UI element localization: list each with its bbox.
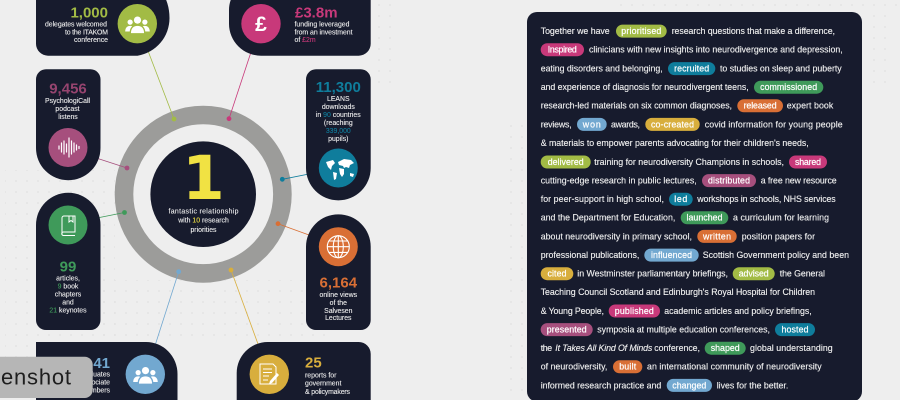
text line 5: released xyxy=(744,101,777,111)
centre caption: priorities xyxy=(190,227,217,234)
text line 2: clinicians with new insights into neurodivergence and depression, xyxy=(589,45,843,55)
text line 7: & materials to empower parents advocating for their children's needs, xyxy=(541,138,809,148)
panel: 1,000 delegates: to the ITAKOM xyxy=(65,30,108,36)
text line 15: Teaching Council Scotland and Edinburgh's Royal Hospital for Children xyxy=(541,287,815,297)
text line 5: research-led materials on six common diagnoses, xyxy=(541,101,732,111)
panel: 1,000 delegates: 1,000 xyxy=(70,4,108,22)
panel: 11,300 downloads: 339,000 xyxy=(326,128,351,135)
icon: people xyxy=(118,4,157,43)
text line 12: about neurodiversity in primary school, xyxy=(541,231,692,241)
text line 14: the General xyxy=(780,269,825,279)
text line 11: launched xyxy=(686,213,723,223)
text line 13: professional publications, xyxy=(541,250,639,260)
panel: £3.8m funding: of £2m xyxy=(294,37,316,44)
text line 20: informed research practice and xyxy=(541,380,661,390)
text line 11: and the Department for Education, xyxy=(541,213,675,223)
text line 18: global understanding xyxy=(750,343,833,353)
text line 13: Scottish Government policy and been xyxy=(703,250,849,260)
panel: 99 articles: 21 keynotes xyxy=(49,308,87,314)
text line 16: academic articles and policy briefings, xyxy=(664,306,812,316)
text line 11 xyxy=(541,211,829,224)
panel: 99 articles xyxy=(36,193,100,330)
text line 9: distributed xyxy=(708,176,750,186)
text line 14: advised xyxy=(739,269,769,279)
text line 8 xyxy=(541,156,827,168)
text line 2: Inspired xyxy=(548,45,577,55)
panel: 99 articles: articles, xyxy=(56,276,80,282)
text line 14 xyxy=(541,267,825,280)
panel: 1,000 delegates xyxy=(36,0,170,56)
panel: 9,456 podcast listens: 9,456 xyxy=(49,80,87,98)
text line 9 xyxy=(541,174,837,187)
text line 16: published xyxy=(615,306,654,316)
icon: world map xyxy=(319,148,358,188)
text line 18: the xyxy=(541,343,552,353)
text line 13 xyxy=(541,249,849,262)
text line 20 xyxy=(541,379,788,392)
screenshot overlay label: enshot xyxy=(1,364,71,390)
icon: pound sign xyxy=(241,4,281,43)
icon: people xyxy=(126,355,165,394)
text line 18: It Takes All Kind Of Minds xyxy=(555,343,653,353)
panel: 41 graduates: 41 xyxy=(93,355,110,372)
panel: 41 graduates: graduates xyxy=(79,372,111,379)
panel: 99 articles: 9 book xyxy=(58,284,79,290)
text line 4 xyxy=(541,81,823,94)
text line 6: reviews, xyxy=(541,119,572,129)
panel: 11,300 downloads: 11,300 xyxy=(316,79,361,96)
panel: 25 reports: 25 xyxy=(305,354,322,372)
screenshot overlay label xyxy=(0,357,93,398)
text line 8: training for neurodiversity Champions in schools, xyxy=(594,157,784,167)
text line 8: delivered xyxy=(548,157,584,167)
text line 20: changed xyxy=(672,380,706,390)
text line 5 xyxy=(541,99,834,112)
text line 18: conference, xyxy=(654,343,700,353)
panel: 6,164 views: Salvesen xyxy=(324,308,353,315)
big number 1: 1 xyxy=(182,143,225,214)
panel: 6,164 views: 6,164 xyxy=(320,274,358,292)
text line 17: presented xyxy=(547,324,587,334)
panel: 41 graduates: associate xyxy=(81,380,110,387)
panel: 11,300 downloads: in 90 countries xyxy=(316,112,361,119)
panel: 6,164 views xyxy=(306,214,371,330)
text line 9: cutting-edge research in public lectures, xyxy=(541,176,697,186)
panel: 25 reports xyxy=(237,342,371,400)
icon: pound sign: £ xyxy=(255,13,267,36)
panel: narrative text xyxy=(527,12,862,400)
text line 4: commissioned xyxy=(760,82,817,92)
text line 1: Together we have xyxy=(541,26,610,36)
text line 18: shaped xyxy=(711,343,740,353)
panel: 9,456 podcast listens: podcast xyxy=(55,106,80,113)
panel: 25 reports: & policymakers xyxy=(305,389,351,396)
text line 4: and experience of diagnosis for neurodivergent teens, xyxy=(541,82,749,92)
connector lines xyxy=(87,43,320,355)
panel: 9,456 podcast listens: PsychologiCall xyxy=(45,98,90,105)
text line 6: co-created xyxy=(651,119,694,129)
panel: 1,000 delegates: delegates welcomed xyxy=(45,22,107,28)
text line 14: cited xyxy=(548,269,567,279)
text line 11: a curriculum for learning xyxy=(733,213,829,223)
panel: 6,164 views: online views xyxy=(320,292,358,299)
panel: 41 graduates: members xyxy=(81,388,111,395)
text line 14: in Westminster parliamentary briefings, xyxy=(577,269,728,279)
panel: 9,456 podcast listens: listens xyxy=(58,114,78,121)
text line 13: influenced xyxy=(651,250,692,260)
text line 9: a free new resource xyxy=(761,176,837,186)
panel: 25 reports: reports for xyxy=(305,372,337,379)
panel: 25 reports: government xyxy=(305,380,341,388)
text line 3: recruited xyxy=(674,64,709,74)
panel: 99 articles: chapters xyxy=(55,292,82,298)
text line 17: hosted xyxy=(782,324,809,334)
panel: £3.8m funding: funding leveraged xyxy=(294,22,350,28)
panel: £3.8m funding: £3.8m xyxy=(295,4,338,22)
panel: 99 articles: and xyxy=(62,300,74,306)
centre caption xyxy=(168,208,239,234)
text line 6: won xyxy=(582,119,601,129)
text line 19: of neurodiversity, xyxy=(541,362,607,372)
text line 3: to studies on sleep and puberty xyxy=(720,64,842,74)
panel: £3.8m funding xyxy=(229,0,371,56)
text line 20: lives for the better. xyxy=(717,380,788,390)
text line 5: expert book xyxy=(787,101,834,111)
panel: 41 graduates xyxy=(36,342,178,400)
panel: 11,300 downloads: LEANS xyxy=(327,96,350,103)
text line 17: symposia at multiple education conferences, xyxy=(597,324,770,334)
icon: book xyxy=(48,206,88,244)
panel: 6,164 views: Lectures xyxy=(325,315,352,322)
text line 10 xyxy=(541,193,836,206)
panel: 9,456 podcast listens xyxy=(36,69,100,180)
text line 3: eating disorders and belonging, xyxy=(541,64,663,74)
text line 17 xyxy=(541,323,815,336)
centre caption: with 10 research xyxy=(177,218,229,225)
panel: 1,000 delegates: conference xyxy=(74,37,108,44)
text line 1: research questions that make a difference, xyxy=(672,26,835,36)
text line 10: for peer-support in high school, xyxy=(541,194,664,204)
text line 19 xyxy=(541,360,822,373)
icon: sound wave xyxy=(48,128,88,167)
text line 6: awards, xyxy=(611,119,640,129)
text line 6 xyxy=(541,118,843,131)
panel: £3.8m funding: from an investment xyxy=(294,30,353,36)
panel: 11,300 downloads: pupils) xyxy=(328,136,348,143)
panel: 11,300 downloads: (reaching xyxy=(324,120,353,127)
text line 10: workshops in schools, NHS services xyxy=(696,194,836,204)
text line 12 xyxy=(541,230,815,243)
icon: document and pen xyxy=(250,355,289,394)
text line 2 xyxy=(541,43,843,56)
panel: 11,300 downloads xyxy=(306,69,371,200)
text line 3 xyxy=(541,62,842,75)
panel: 11,300 downloads: downloads xyxy=(322,104,355,111)
icon: globe xyxy=(319,227,358,266)
text line 18 xyxy=(541,342,833,355)
panel: 99 articles: 99 xyxy=(60,258,76,276)
text line 19: built xyxy=(619,362,637,372)
text line 6: covid information for young people xyxy=(705,119,843,129)
text line 12: written xyxy=(702,231,731,241)
text line 16 xyxy=(541,304,812,318)
text line 19: an international community of neurodiversity xyxy=(647,362,822,372)
text line 10: led xyxy=(674,194,687,204)
centre caption: fantastic relationship xyxy=(168,208,239,216)
text line 8: shared xyxy=(795,157,821,167)
text line 1 xyxy=(541,25,835,38)
panel: 6,164 views: of the xyxy=(330,300,347,307)
text line 12: position papers for xyxy=(742,231,815,241)
ring and centre xyxy=(124,115,282,273)
text line 16: & Young People, xyxy=(541,306,604,316)
text line 1: prioritised xyxy=(621,26,661,36)
